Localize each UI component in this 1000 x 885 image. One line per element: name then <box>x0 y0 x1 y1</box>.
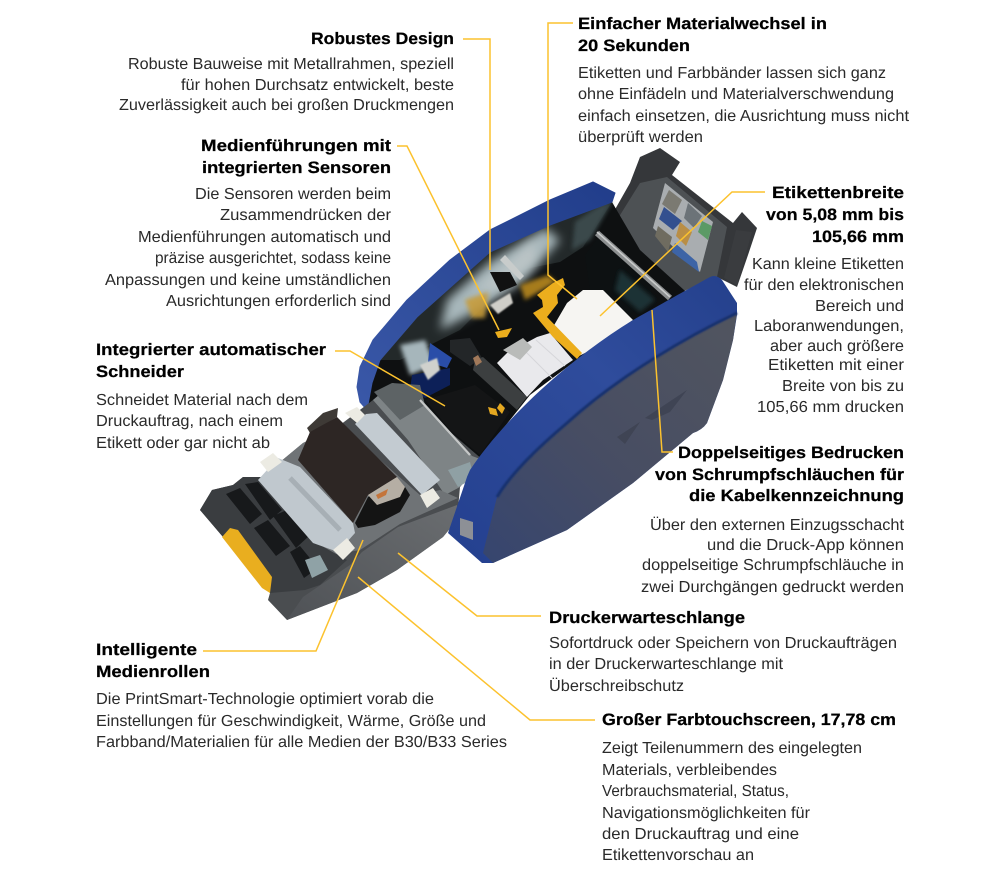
body text: Über den externen Einzugsschacht <box>650 516 905 534</box>
tray front face <box>287 505 457 620</box>
body text: Druckauftrag, nach einem <box>96 413 283 430</box>
print head block <box>298 408 410 528</box>
paper tray <box>200 383 483 620</box>
heading <box>201 137 392 177</box>
body text: Verbrauchsmaterial, Status, <box>602 783 789 800</box>
body text: Ausrichtungen erforderlich sind <box>166 293 391 310</box>
heading: Großer Farbtouchscreen, 17,78 cm <box>602 711 896 729</box>
tray rim <box>262 425 458 555</box>
body text: Bereich und <box>815 298 904 315</box>
body text: Schneidet Material nach dem <box>96 392 308 409</box>
printer interior <box>367 202 695 470</box>
instruction sticker <box>653 183 713 272</box>
body text: in der Druckerwarteschlange mit <box>549 656 784 673</box>
body text: Breite von bis zu <box>782 378 904 395</box>
heading: Integrierter automatischer <box>96 341 327 359</box>
heading <box>766 184 904 246</box>
body text: Einstellungen für Geschwindigkeit, Wärme, Größe und <box>96 713 486 730</box>
heading: Medienführungen mit <box>201 137 392 155</box>
body text: Etiketten und Farbbänder lassen sich ganz <box>578 65 886 82</box>
heading: von Schrumpfschläuchen für <box>655 466 905 484</box>
rear flap with instruction sticker <box>582 148 757 297</box>
heading <box>655 444 905 505</box>
body text: Die Sensoren werden beim <box>195 186 391 203</box>
heading: von 5,08 mm bis <box>766 206 904 224</box>
body text: Navigationsmöglichkeiten für <box>602 805 811 822</box>
body text: Etiketten mit einer <box>768 357 905 374</box>
ribbon spools <box>258 407 440 560</box>
white label roll and media <box>497 290 633 397</box>
callout: Doppelseitiges Bedrucken <box>641 444 905 596</box>
guide rod <box>597 233 670 298</box>
body text: aber auch größere <box>770 338 904 355</box>
body text: Anpassungen und keine umständlichen <box>105 272 391 289</box>
yellow media guides <box>495 278 582 359</box>
body text: für hohen Durchsatz entwickelt, beste <box>181 77 454 94</box>
body text <box>744 256 905 416</box>
body text <box>602 740 862 864</box>
heading <box>578 15 827 55</box>
body text: Etikett oder gar nicht ab <box>96 435 270 452</box>
body text: Kann kleine Etiketten <box>752 256 904 273</box>
body text: präzise ausgerichtet, sodass keine <box>155 250 391 267</box>
body text <box>96 691 507 751</box>
body text: Zusammendrücken der <box>220 207 392 224</box>
body text <box>549 635 897 695</box>
body text: Zeigt Teilenummern des eingelegten <box>602 740 862 757</box>
body text <box>578 65 910 146</box>
callout: Etikettenbreite <box>744 184 905 416</box>
callout: Druckerwarteschlange <box>549 609 897 695</box>
heading: Etikettenbreite <box>772 184 904 202</box>
callout: Intelligente Medienrollen <box>96 641 507 751</box>
printer photo illustration <box>200 148 757 620</box>
body text: Überschreibschutz <box>549 677 684 695</box>
heading: integrierten Sensoren <box>202 159 391 177</box>
heading: Intelligente <box>96 641 197 659</box>
body text: und die Druck-App können <box>707 537 904 554</box>
body text: einfach einsetzen, die Ausrichtung muss nicht <box>578 108 910 125</box>
heading: Schneider <box>96 363 185 381</box>
body text: doppelseitige Schrumpfschläuche in <box>642 557 904 574</box>
body text: Medienführungen automatisch und <box>138 229 391 246</box>
heading: 105,66 mm <box>812 228 904 246</box>
rear blue shell <box>357 182 615 410</box>
body text <box>641 516 905 596</box>
body text: Zuverlässigkeit auch bei großen Druckmengen <box>119 97 454 114</box>
body text: zwei Durchgängen gedruckt werden <box>641 579 904 596</box>
heading: die Kabelkennzeichnung <box>689 487 904 505</box>
body text: Laboranwendungen, <box>754 318 904 335</box>
heading: Druckerwarteschlange <box>549 609 745 627</box>
callout: Robustes Design <box>119 30 454 114</box>
front blue cover <box>448 276 737 563</box>
body text: überprüft werden <box>578 129 703 146</box>
body text: Sofortdruck oder Speichern von Druckaufträgen <box>549 635 897 652</box>
body text: Farbband/Materialien für alle Medien der B30/B33 Series <box>96 734 507 751</box>
body text: Robuste Bauweise mit Metallrahmen, speziell <box>128 56 454 73</box>
callout: Farbtouchscreen <box>602 711 896 864</box>
callout: Medienführungen <box>105 137 392 310</box>
body text <box>105 186 392 310</box>
callout: Schneider <box>96 341 327 452</box>
yellow handle <box>222 528 272 593</box>
heading: Robustes Design <box>311 30 454 48</box>
body text: Etikettenvorschau an <box>602 847 754 864</box>
body text <box>96 392 308 452</box>
body text: Die PrintSmart-Technologie optimiert vorab die <box>96 691 434 708</box>
body text: Materials, verbleibendes <box>602 762 777 779</box>
body text <box>119 56 454 114</box>
heading <box>96 641 210 681</box>
heading: Medienrollen <box>96 663 210 681</box>
heading: 20 Sekunden <box>578 37 690 55</box>
body text: den Druckauftrag und eine <box>602 826 799 843</box>
body text: ohne Einfädeln und Materialverschwendung <box>578 86 894 103</box>
tray bed <box>373 383 483 495</box>
callout: Materialwechsel <box>578 15 910 146</box>
body text: 105,66 mm drucken <box>757 399 904 416</box>
heading: Doppelseitiges Bedrucken <box>678 444 904 462</box>
heading <box>96 341 327 381</box>
body text: für den elektronischen <box>744 277 904 294</box>
heading: Einfacher Materialwechsel in <box>578 15 827 33</box>
latch bar with slots <box>200 477 347 593</box>
leader lines <box>203 23 765 720</box>
